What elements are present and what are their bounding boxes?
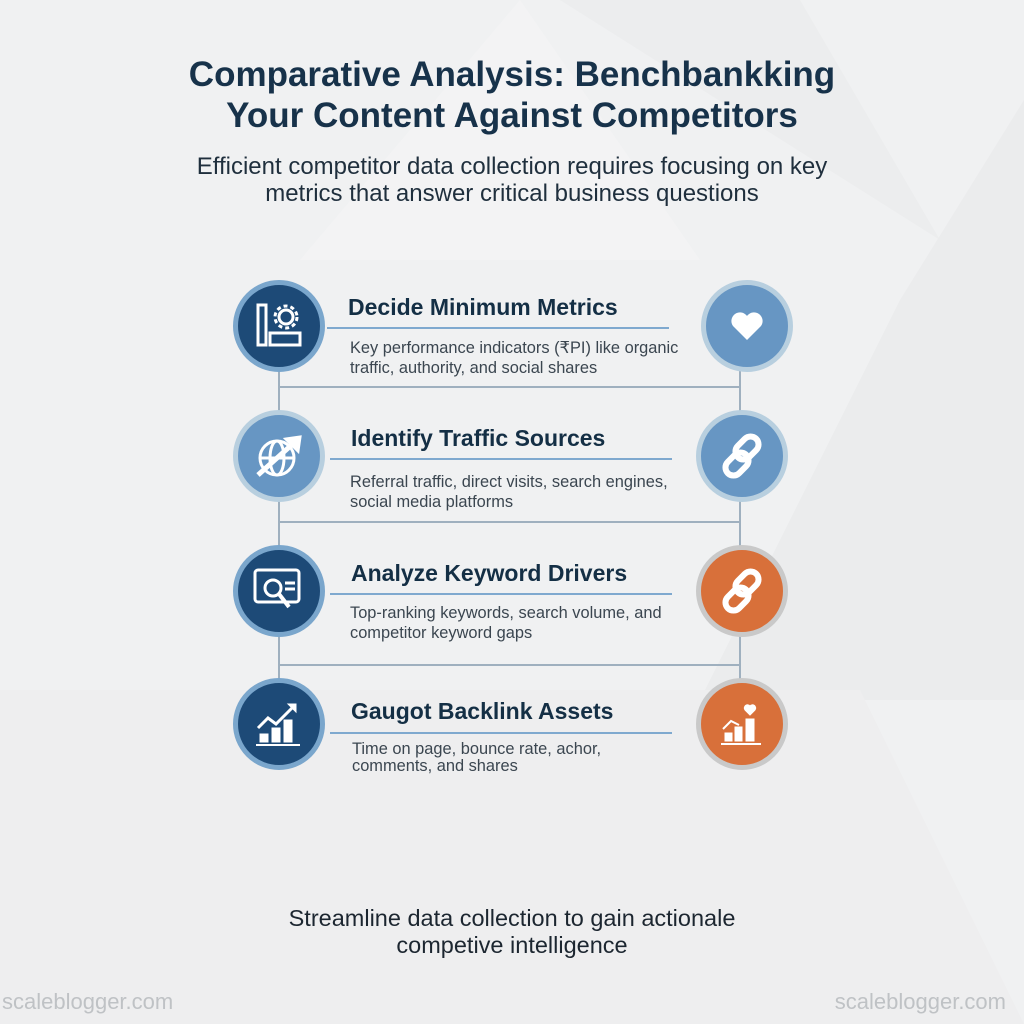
icon: orange link: [696, 545, 788, 637]
title: [189, 55, 835, 135]
row 2: [233, 410, 788, 511]
description: competitor keyword gaps: [350, 624, 532, 642]
description: Key performance indicators (₹PI) like organic: [350, 339, 678, 357]
footer text: Streamline data collection to gain actionale: [289, 905, 735, 931]
description: [352, 740, 601, 775]
icon: heart: [701, 280, 793, 372]
subtitle: [197, 153, 828, 207]
title: Your Content Against Competitors: [226, 96, 798, 135]
description: Referral traffic, direct visits, search engines,: [350, 473, 668, 491]
description: [350, 339, 678, 377]
footer text: [289, 905, 735, 958]
description: social media platforms: [350, 493, 513, 511]
subtitle: Efficient competitor data collection requires focusing on key: [197, 153, 827, 180]
icon: search screen: [233, 545, 325, 637]
row 3: [233, 545, 788, 642]
description: Time on page, bounce rate, achor,: [352, 740, 601, 758]
subtitle: metrics that answer critical business questions: [265, 180, 759, 207]
heading: Gaugot Backlink Assets: [351, 698, 613, 724]
icon: orange chart heart: [696, 678, 788, 770]
description: [350, 473, 668, 511]
description: comments, and shares: [352, 757, 518, 775]
row 1: [233, 280, 793, 377]
watermark left: scaleblogger.com: [2, 989, 173, 1014]
title: Comparative Analysis: Benchbankking: [189, 55, 835, 94]
watermark right: scaleblogger.com: [835, 989, 1006, 1014]
heading: Analyze Keyword Drivers: [351, 560, 627, 586]
description: [350, 604, 662, 642]
heading: Identify Traffic Sources: [351, 425, 605, 451]
row 4: [233, 678, 788, 775]
icon: metrics gear: [233, 280, 325, 372]
footer text: competive intelligence: [396, 932, 628, 958]
heading: Decide Minimum Metrics: [348, 294, 618, 320]
icon: globe arrow: [233, 410, 325, 502]
icon: growth chart: [233, 678, 325, 770]
description: traffic, authority, and social shares: [350, 359, 597, 377]
icon: link: [696, 410, 788, 502]
description: Top-ranking keywords, search volume, and: [350, 604, 662, 622]
